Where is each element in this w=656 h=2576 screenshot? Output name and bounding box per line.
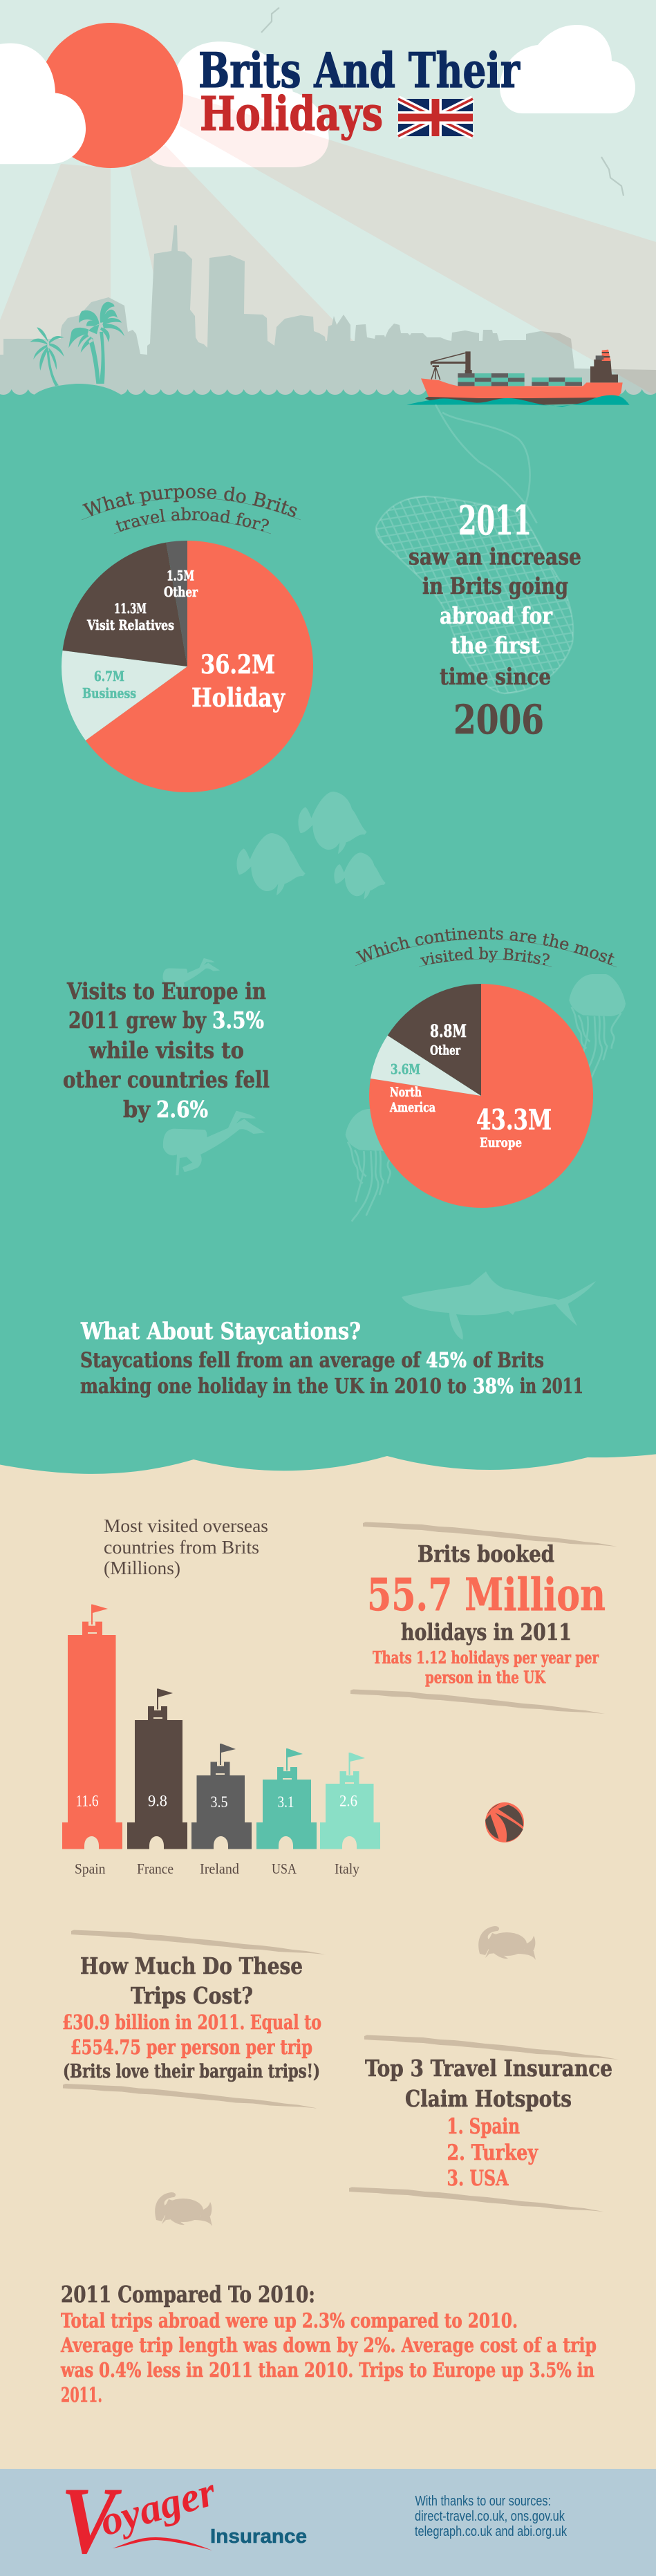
callout: 2011 increase: saw an increase xyxy=(409,543,581,570)
pie slice: europe xyxy=(369,984,593,1208)
curved heading: travel abroad for? xyxy=(115,507,269,532)
diver: small xyxy=(163,958,220,994)
label: other: 8.8M xyxy=(430,1021,467,1041)
label: holiday xyxy=(191,649,285,713)
bird: upper xyxy=(261,8,279,32)
cloud: behind title xyxy=(149,41,329,167)
scuba divers xyxy=(163,958,265,1175)
chart heading: most visited countries: (Millions) xyxy=(104,1558,180,1578)
jellyfish: left xyxy=(346,1109,402,1222)
pie slice: business xyxy=(62,651,187,740)
fishing net xyxy=(376,496,573,693)
callout: 2011 increase: the first xyxy=(451,632,541,659)
bar: USA: 3.1 xyxy=(278,1793,294,1811)
ship hull xyxy=(421,378,623,398)
callout: 2011 increase: time since xyxy=(440,663,551,690)
label: holiday: 36.2M xyxy=(200,649,275,680)
footer band xyxy=(0,2469,656,2576)
logo swoosh xyxy=(113,2537,212,2550)
label: other: 1.5M xyxy=(167,567,194,584)
pie slice: visit relatives xyxy=(62,543,187,666)
text block: 2011 compared to 2010 xyxy=(60,2281,597,2407)
bar labels: Italy xyxy=(335,1860,359,1877)
pie chart panel: continents xyxy=(355,928,617,1208)
brush stroke below trip costs xyxy=(63,2084,317,2109)
comparison body xyxy=(60,2309,597,2407)
brush stroke below holidays booked xyxy=(350,1690,605,1714)
logo word insurance: Insurance xyxy=(210,2526,307,2548)
callout: trip costs: (Brits love their bargain trips!) xyxy=(63,2061,320,2082)
callout: insurance claim hotspots: 1. Spain xyxy=(447,2114,520,2139)
callout: 2011 increase: abroad for xyxy=(440,602,553,629)
curved heading: What purpose do Brits xyxy=(82,487,297,517)
wave around ship xyxy=(406,395,630,407)
bar: Italy: 2.6 xyxy=(339,1792,357,1810)
callout: holidays booked xyxy=(367,1540,606,1687)
island xyxy=(33,384,122,395)
callout: insurance claim hotspots: 3. USA xyxy=(447,2166,509,2191)
callout: trip costs: Trips Cost? xyxy=(131,1982,253,2009)
cargo ship xyxy=(406,350,630,523)
palm tree: leaning xyxy=(68,325,100,384)
staycations body: 45% xyxy=(426,1348,467,1372)
brush stroke above trip costs xyxy=(71,1930,326,1954)
callout: holidays booked: Brits booked xyxy=(418,1540,554,1567)
fish: left xyxy=(236,833,306,895)
label: europe xyxy=(476,1103,552,1150)
bar labels: France xyxy=(137,1860,174,1877)
bar: USA xyxy=(256,1748,317,1849)
staycations body xyxy=(80,1348,583,1399)
icon: crab left xyxy=(155,2192,212,2226)
pie slice: other xyxy=(388,984,481,1096)
title xyxy=(198,43,521,141)
icon: beach ball xyxy=(485,1802,524,1842)
callout: holidays booked: person in the UK xyxy=(425,1668,546,1687)
comparison body: Total trips abroad were up 2.3% compared to 2010. xyxy=(61,2309,518,2333)
ship funnel xyxy=(596,350,610,361)
ship keel xyxy=(425,396,606,405)
bar: Spain xyxy=(62,1605,122,1849)
net ropes xyxy=(435,404,537,523)
pie slice: other xyxy=(166,541,187,666)
callout: insurance claim hotspots: Top 3 Travel Insurance xyxy=(365,2055,612,2082)
diver: large xyxy=(163,1111,265,1175)
brush stroke below insurance hotspots xyxy=(349,2187,603,2212)
logo script name: oyager xyxy=(95,2468,221,2544)
sun xyxy=(38,23,183,168)
label: north america xyxy=(389,1085,435,1115)
staycations body: Staycations fell from an average of xyxy=(80,1348,422,1372)
callout: insurance claim hotspots xyxy=(365,2055,612,2191)
callout: trip costs: How Much Do These xyxy=(80,1952,303,1979)
pie slice: holiday xyxy=(86,541,313,792)
callout: trip costs: £554.75 per person per trip xyxy=(71,2035,312,2059)
bar: Ireland xyxy=(191,1744,252,1849)
logo script V: V xyxy=(61,2467,122,2573)
callout: 2011 increase: 2006 xyxy=(453,696,544,743)
large sun ray over skyline xyxy=(180,94,656,396)
sources credit xyxy=(415,2494,568,2539)
staycations body: in 2011 xyxy=(520,1374,583,1399)
callout: insurance claim hotspots: 2. Turkey xyxy=(447,2140,538,2165)
comparison body: 2011. xyxy=(61,2383,102,2407)
curved heading: Which continents are the most xyxy=(355,928,615,965)
containers: aft stack xyxy=(532,377,582,386)
city skyline xyxy=(0,225,656,398)
callout: visits to Europe: 2011 grew by xyxy=(68,1007,207,1034)
comparison heading: 2011 Compared To 2010: xyxy=(61,2281,315,2308)
label: visit relatives: Visit Relatives xyxy=(86,617,174,633)
label: europe: 43.3M xyxy=(476,1103,552,1137)
label: business: 6.7M xyxy=(94,668,124,684)
bar: Ireland: 3.5 xyxy=(210,1793,228,1811)
sources credit: With thanks to our sources: xyxy=(415,2494,551,2509)
staycations text block xyxy=(80,1318,583,1399)
sun rays behind skyline xyxy=(0,145,408,398)
ship superstructure xyxy=(590,360,618,382)
staycations body: 38% xyxy=(473,1374,514,1399)
staycations body: making one holiday in the UK in 2010 to xyxy=(80,1374,467,1399)
label: other xyxy=(164,567,198,600)
label: visit relatives: 11.3M xyxy=(114,600,147,617)
bird: right xyxy=(601,157,624,196)
chart heading: most visited countries: Most visited overseas xyxy=(104,1515,268,1536)
callout: visits to Europe: by xyxy=(123,1096,151,1123)
label: europe: Europe xyxy=(480,1135,522,1150)
sources credit: direct-travel.co.uk, ons.gov.uk xyxy=(415,2509,565,2524)
callout: 2011 increase: in Brits going xyxy=(422,572,568,599)
bar labels: Spain xyxy=(75,1860,106,1877)
callout: trip costs xyxy=(62,1952,321,2082)
chart heading: most visited countries xyxy=(104,1515,268,1578)
callout: insurance claim hotspots: Claim Hotspots xyxy=(405,2085,572,2112)
logo: Voyager Insurance xyxy=(61,2467,307,2573)
palm tree: small xyxy=(30,327,64,386)
sea with scalloped top and wavy shore xyxy=(0,389,656,1474)
curved heading: visited by Brits? xyxy=(420,947,550,965)
callout: holidays booked: holidays in 2011 xyxy=(401,1618,572,1645)
callout: visits to Europe xyxy=(63,978,270,1123)
label: north america value: 3.6M xyxy=(391,1061,420,1078)
bar: Italy xyxy=(320,1753,380,1849)
label: north america: America xyxy=(389,1100,435,1115)
cloud: right xyxy=(500,25,635,113)
label: holiday: Holiday xyxy=(191,682,285,713)
title line one: Brits And Their xyxy=(198,43,521,99)
callout: visits to Europe: Visits to Europe in xyxy=(66,978,266,1005)
label: north america: North xyxy=(390,1085,422,1100)
callout: visits to Europe: 3.5% xyxy=(212,1007,264,1034)
school of fish xyxy=(236,792,386,899)
bar labels: Ireland xyxy=(200,1860,239,1877)
jellyfish: right xyxy=(569,974,626,1087)
label: other: Other xyxy=(164,584,198,600)
shark xyxy=(402,1271,596,1340)
staycations body: of Brits xyxy=(473,1348,544,1372)
callout: 2011 increase xyxy=(409,497,581,743)
label: business xyxy=(82,668,136,701)
callout: 2011 increase: 2011 xyxy=(458,497,532,544)
chart heading: most visited countries: countries from Brits xyxy=(104,1537,259,1558)
sandcastle bar chart xyxy=(62,1605,380,1877)
palm tree: tall xyxy=(79,302,124,384)
callout: trip costs: £30.9 billion in 2011. Equal to xyxy=(62,2010,321,2034)
bar labels xyxy=(75,1860,359,1877)
bar labels: USA xyxy=(272,1860,297,1877)
label: business: Business xyxy=(82,684,136,701)
callout: visits to Europe: other countries fell xyxy=(63,1066,270,1093)
icon: crab right xyxy=(478,1926,536,1960)
fish: small xyxy=(334,852,386,899)
pie slice: north america xyxy=(371,1036,481,1096)
label: other xyxy=(430,1021,467,1058)
pie chart panel: travel purpose xyxy=(62,487,313,792)
sky background xyxy=(0,0,656,398)
sand background xyxy=(0,1445,656,2475)
containers: fore stack xyxy=(458,373,525,386)
title line two: Holidays xyxy=(200,86,383,141)
curved heading xyxy=(82,487,301,534)
callout: visits to Europe: while visits to xyxy=(88,1037,244,1064)
island with palm trees xyxy=(30,302,124,395)
brush stroke above holidays booked xyxy=(363,1522,617,1547)
bar: France xyxy=(127,1688,187,1849)
sources credit: telegraph.co.uk and abi.org.uk xyxy=(415,2524,568,2539)
ship crane xyxy=(431,351,472,380)
label: other: Other xyxy=(430,1043,461,1058)
label: visit relatives xyxy=(86,600,174,633)
brush stroke above insurance hotspots xyxy=(364,2035,619,2060)
staycations heading: What About Staycations? xyxy=(80,1318,361,1345)
bar: Spain: 11.6 xyxy=(76,1792,98,1810)
bar: France: 9.8 xyxy=(148,1792,167,1810)
jellyfish xyxy=(346,974,626,1222)
fish: top xyxy=(298,792,367,854)
cloud: left over sun xyxy=(0,43,86,164)
icon: union jack flag xyxy=(398,99,473,136)
callout: visits to Europe: 2.6% xyxy=(156,1096,208,1123)
